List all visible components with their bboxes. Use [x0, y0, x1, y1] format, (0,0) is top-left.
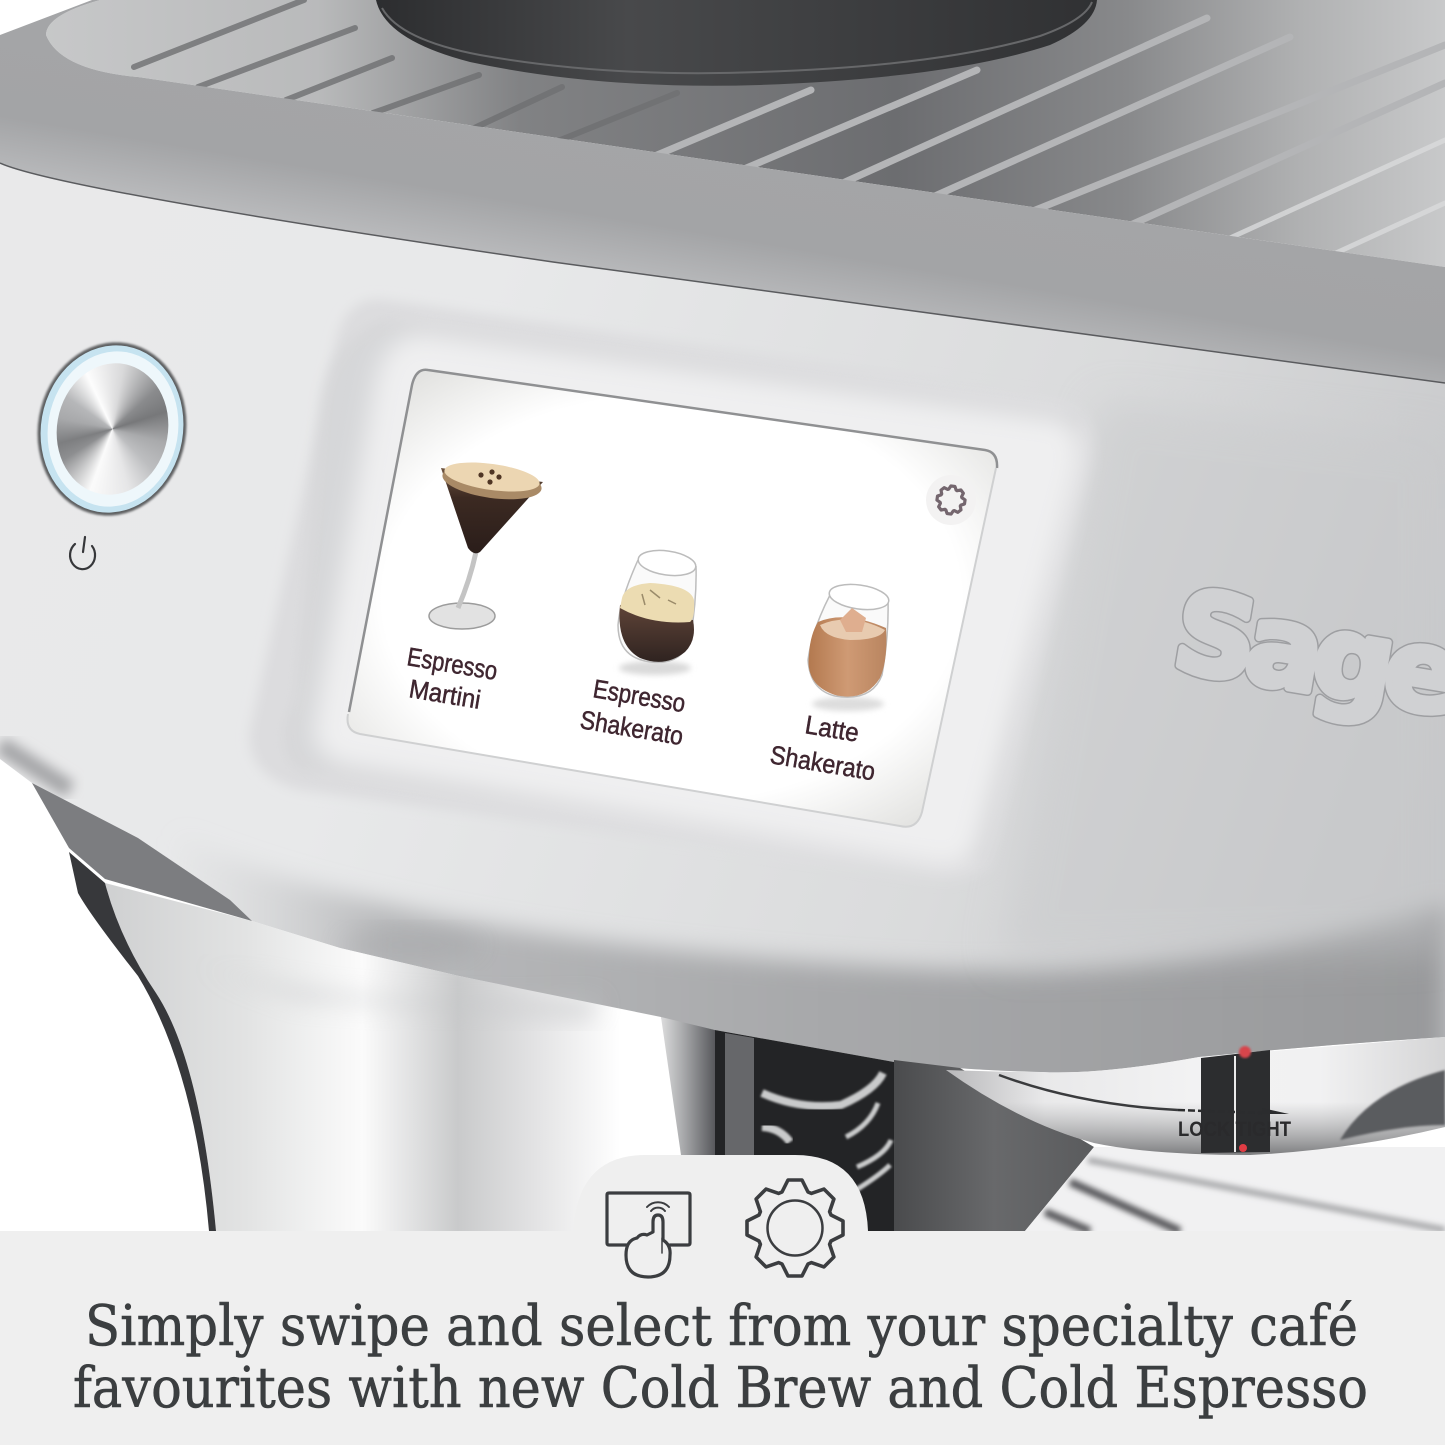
machine: group head	[715, 1030, 1445, 1231]
icon: settings gear	[926, 475, 976, 525]
machine: brushed steel front	[0, 163, 1445, 1100]
label: Latte Shakerato: Latte	[803, 709, 861, 748]
caption text: Simply swipe and select from your specialty café	[85, 1294, 1358, 1359]
label: Espresso Martini	[405, 641, 500, 715]
caption text	[73, 1294, 1368, 1421]
caption band	[0, 1155, 1445, 1445]
machine: polished neck	[32, 783, 715, 1231]
power button	[24, 330, 200, 569]
drink: latte shakerato	[808, 581, 890, 711]
power button disc	[46, 354, 179, 504]
portafilter collar	[946, 1037, 1445, 1155]
label: Espresso Shakerato: Espresso	[591, 673, 688, 718]
coffee cup base	[376, 0, 1097, 86]
machine: drip tray	[46, 0, 1445, 267]
icon: touch screen	[607, 1193, 690, 1277]
drink: espresso shakerato	[618, 547, 697, 675]
label: Latte Shakerato: Shakerato	[768, 739, 878, 786]
label: Latte Shakerato	[768, 709, 878, 786]
drink: espresso martini	[429, 457, 544, 629]
label: Espresso Shakerato: Shakerato	[578, 704, 686, 751]
label: lock tight: LOCK TIGHT	[1178, 1118, 1291, 1141]
touchscreen	[348, 370, 997, 827]
machine: screen recess	[250, 300, 1092, 876]
label: Espresso Martini: Espresso	[405, 641, 500, 686]
machine: top rim	[0, 0, 1445, 383]
label: Espresso Shakerato	[578, 673, 688, 751]
icon: power symbol	[70, 537, 95, 569]
label: Espresso Martini: Martini	[407, 673, 483, 715]
icon: gear	[747, 1180, 843, 1276]
